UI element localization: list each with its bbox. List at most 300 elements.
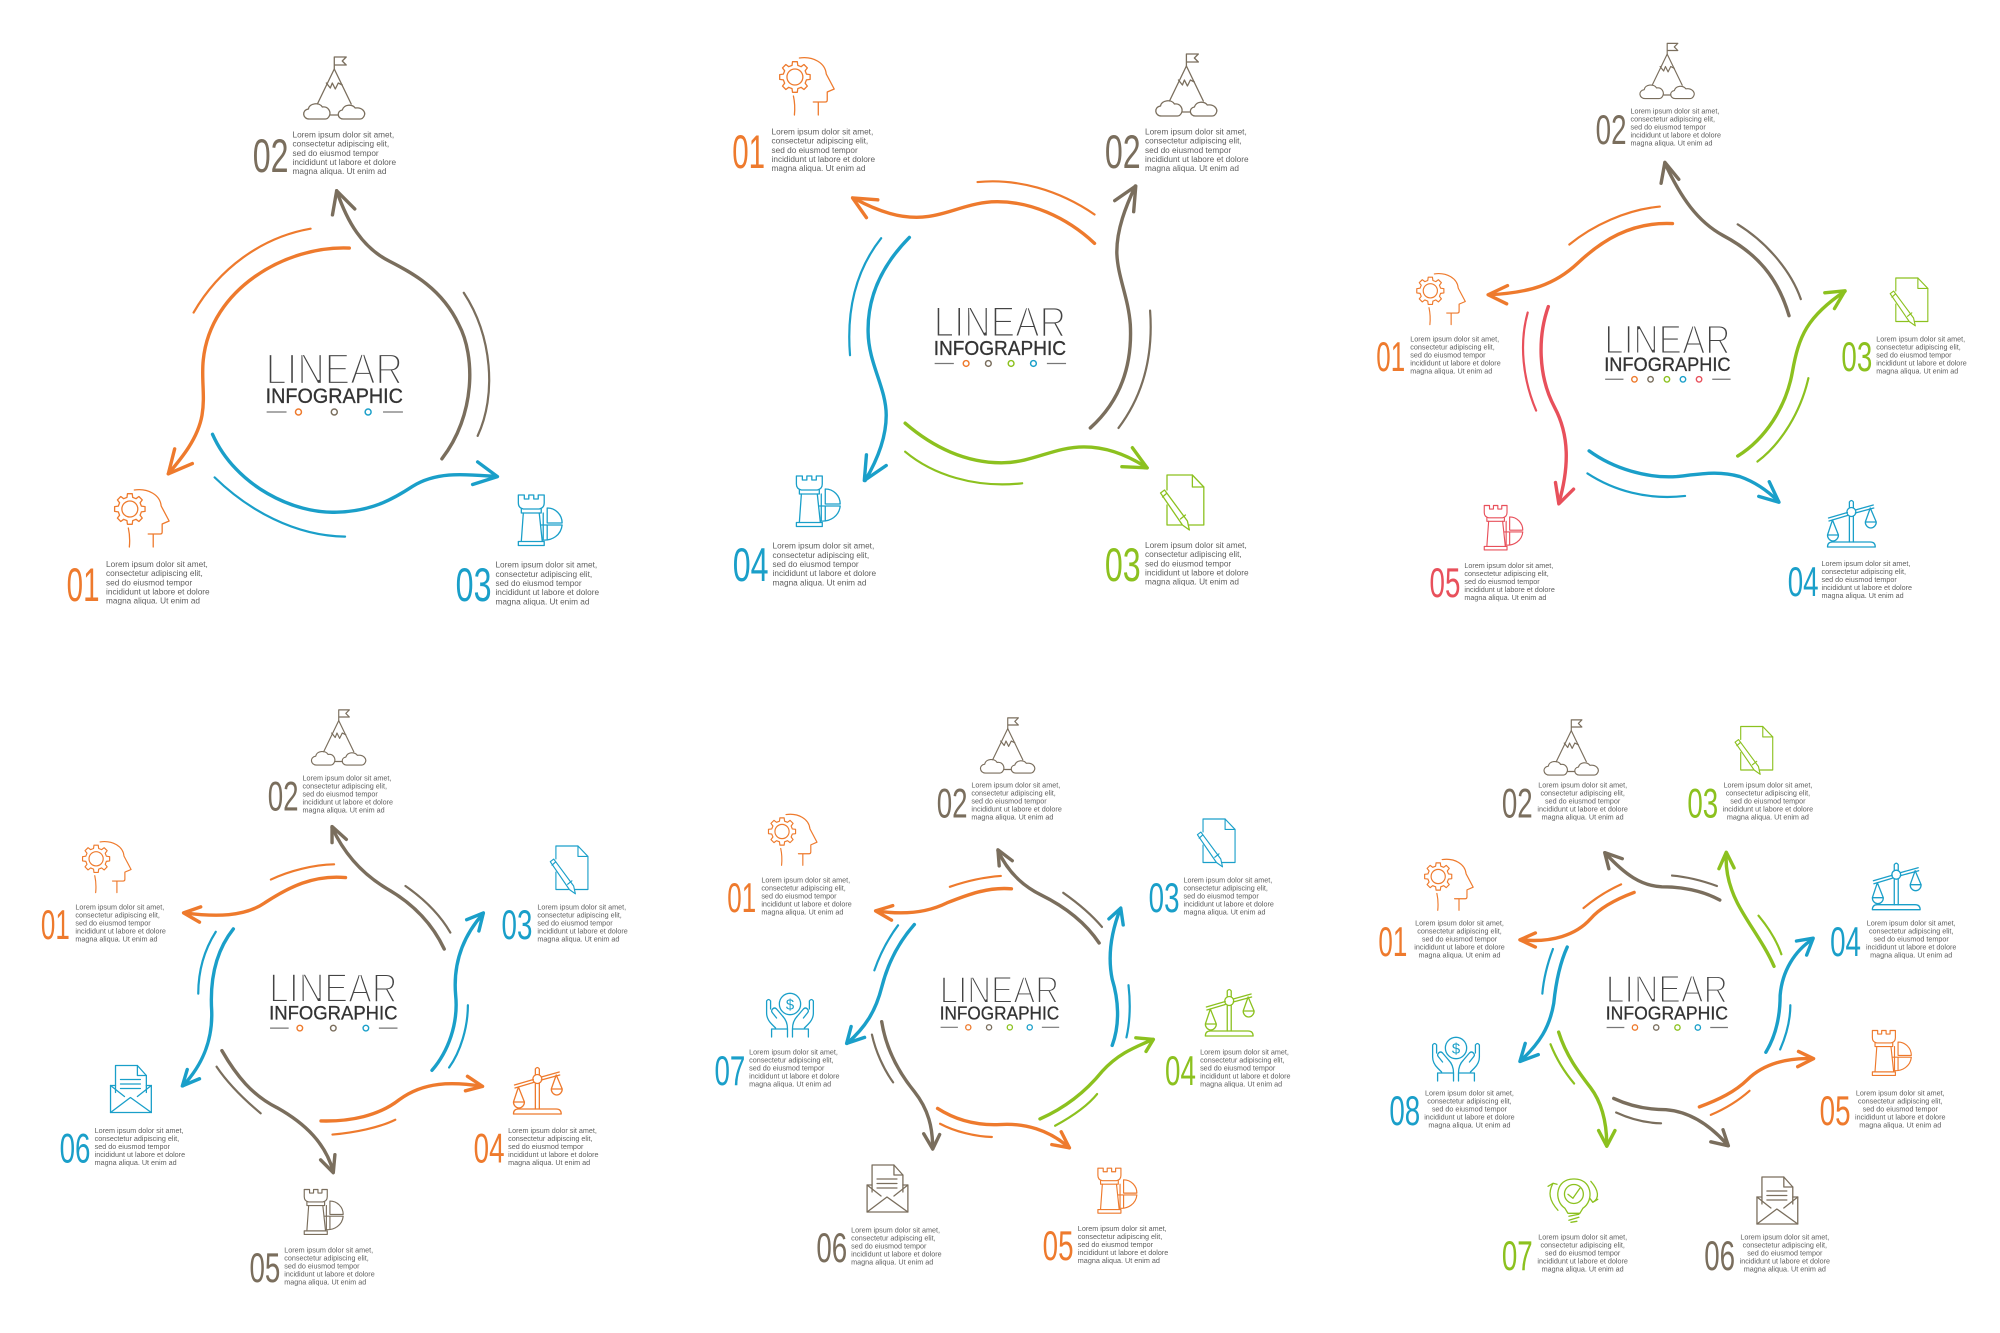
arrow: brown 06	[1614, 1098, 1728, 1146]
text block: incididunt ut labore et dolore	[75, 927, 166, 936]
text block: magna aliqua. Ut enim ad	[95, 1158, 177, 1167]
number 02: 02	[268, 772, 299, 820]
arrow: brown	[1090, 186, 1151, 428]
number 04: 04	[733, 539, 769, 591]
arrow: blue	[213, 434, 497, 537]
icon: envelope with letter	[867, 1165, 908, 1212]
arrow: orange 01	[876, 876, 1011, 920]
text block: consectetur adipiscing elit,	[1078, 1232, 1162, 1241]
icon: balance scale	[1205, 990, 1254, 1036]
number 06: 06	[1704, 1232, 1735, 1279]
item 04	[1788, 500, 1912, 605]
number 05: 05	[250, 1244, 280, 1291]
number 01: 01	[1376, 333, 1405, 380]
text block: Lorem ipsum dolor sit amet,	[1867, 919, 1956, 928]
number 02: 02	[1502, 780, 1533, 827]
text block: sed do eiusmod tempor	[1545, 797, 1621, 806]
text block: magna aliqua. Ut enim ad	[1822, 591, 1904, 600]
item 07	[1502, 1179, 1628, 1279]
item 01	[67, 490, 210, 611]
text block: incididunt ut labore et dolore	[495, 588, 599, 597]
text block: Lorem ipsum dolor sit amet,	[95, 1126, 183, 1135]
text block: incididunt ut labore et dolore	[303, 798, 393, 807]
center logo: LINEAR	[269, 965, 397, 1011]
number 02: 02	[937, 780, 968, 827]
item 06	[60, 1066, 185, 1172]
text block: incididunt ut labore et dolore	[106, 587, 210, 597]
arrow: blue 03	[432, 913, 483, 1070]
text block: Lorem ipsum dolor sit amet,	[1200, 1048, 1289, 1057]
text block: incididunt ut labore et dolore	[1183, 900, 1274, 909]
arrow: brown 06	[872, 1022, 940, 1149]
text block: Lorem ipsum dolor sit amet,	[284, 1246, 373, 1255]
text block: sed do eiusmod tempor	[761, 892, 837, 901]
text block: sed do eiusmod tempor	[1863, 1104, 1938, 1113]
center logo: INFOGRAPHIC	[1606, 1002, 1728, 1024]
text block: Lorem ipsum dolor sit amet,	[106, 560, 208, 569]
arrow: green	[905, 423, 1147, 484]
number 04: 04	[474, 1125, 505, 1172]
text block: consectetur adipiscing elit,	[772, 137, 868, 146]
arrow: blue 08	[1520, 947, 1567, 1061]
text block: magna aliqua. Ut enim ad	[495, 597, 590, 606]
text block: sed do eiusmod tempor	[772, 146, 858, 155]
panel: six-step cycle	[41, 710, 628, 1291]
item 02	[268, 710, 393, 820]
text block: incididunt ut labore et dolore	[1822, 583, 1912, 592]
number 02: 02	[1105, 126, 1141, 178]
item 02	[1502, 720, 1628, 827]
text block: consectetur adipiscing elit,	[1540, 1241, 1625, 1250]
icon: envelope with letter	[111, 1066, 151, 1112]
text block: magna aliqua. Ut enim ad	[106, 597, 200, 606]
text block: magna aliqua. Ut enim ad	[971, 813, 1053, 822]
center logo: LINEAR	[1604, 316, 1731, 363]
item 05	[250, 1190, 375, 1291]
text block: Lorem ipsum dolor sit amet,	[1538, 781, 1627, 790]
item 04	[1830, 863, 1956, 965]
text block: consectetur adipiscing elit,	[1726, 789, 1810, 798]
text block: consectetur adipiscing elit,	[773, 551, 869, 560]
text block: sed do eiusmod tempor	[851, 1242, 927, 1251]
number 04: 04	[1830, 918, 1861, 965]
text block: sed do eiusmod tempor	[75, 919, 151, 928]
text block: sed do eiusmod tempor	[508, 1142, 584, 1151]
icon: chess rook with pie chart	[1872, 1030, 1911, 1075]
panel: seven-step cycle	[714, 718, 1291, 1271]
text block: incididunt ut labore et dolore	[1424, 1112, 1515, 1121]
text block: incididunt ut labore et dolore	[293, 158, 396, 167]
icon: head with gear	[1417, 274, 1465, 325]
item 07	[714, 993, 840, 1094]
text block: magna aliqua. Ut enim ad	[851, 1258, 933, 1267]
text block: consectetur adipiscing elit,	[1200, 1056, 1285, 1065]
icon: document and pen	[550, 846, 588, 894]
center logo	[1606, 969, 1728, 1030]
text block: magna aliqua. Ut enim ad	[1542, 1265, 1624, 1274]
text block: sed do eiusmod tempor	[749, 1064, 825, 1073]
text block: sed do eiusmod tempor	[303, 790, 378, 799]
text block: magna aliqua. Ut enim ad	[1870, 951, 1952, 960]
text block: sed do eiusmod tempor	[1410, 351, 1486, 360]
text block: consectetur adipiscing elit,	[508, 1134, 593, 1143]
text block: sed do eiusmod tempor	[773, 560, 859, 569]
text block: Lorem ipsum dolor sit amet,	[508, 1126, 597, 1135]
text block: consectetur adipiscing elit,	[1145, 550, 1242, 559]
text block: Lorem ipsum dolor sit amet,	[1876, 335, 1965, 344]
text block: incididunt ut labore et dolore	[1200, 1072, 1291, 1081]
number 05: 05	[1430, 559, 1460, 606]
text block: sed do eiusmod tempor	[1183, 892, 1259, 901]
center logo: INFOGRAPHIC	[940, 1003, 1059, 1024]
number 03: 03	[1105, 539, 1141, 591]
item 03	[456, 495, 599, 611]
number 05: 05	[1043, 1222, 1074, 1269]
arrow: green 04	[1040, 1038, 1153, 1126]
text block: incididunt ut labore et dolore	[1866, 943, 1956, 952]
icon: head with gear	[768, 814, 817, 865]
number 05: 05	[1820, 1087, 1850, 1134]
text block: consectetur adipiscing elit,	[1464, 569, 1549, 578]
arrow: green 03	[1719, 852, 1781, 966]
text block: consectetur adipiscing elit,	[1183, 884, 1268, 893]
text block: Lorem ipsum dolor sit amet,	[1183, 876, 1272, 885]
text block: incididunt ut labore et dolore	[772, 155, 876, 164]
text block: Lorem ipsum dolor sit amet,	[761, 876, 850, 885]
text block: magna aliqua. Ut enim ad	[1631, 139, 1713, 148]
item 02	[1105, 54, 1249, 178]
panel: five-step cycle	[1376, 43, 1967, 606]
arrow: brown 02	[332, 827, 450, 949]
text block: consectetur adipiscing elit,	[1869, 927, 1953, 936]
number 08: 08	[1389, 1087, 1420, 1134]
text block: incididunt ut labore et dolore	[1631, 131, 1721, 140]
item 03	[1841, 278, 1967, 380]
text block: sed do eiusmod tempor	[1078, 1240, 1154, 1249]
text block: consectetur adipiscing elit,	[1631, 115, 1715, 124]
icon: hands holding dollar coin: $	[786, 996, 795, 1014]
text block: sed do eiusmod tempor	[1730, 797, 1806, 806]
icon: head with gear	[780, 58, 834, 115]
text block: incididunt ut labore et dolore	[1145, 155, 1249, 164]
arrow: orange 05	[1699, 1051, 1814, 1115]
text block: Lorem ipsum dolor sit amet,	[1822, 559, 1910, 568]
text block: Lorem ipsum dolor sit amet,	[75, 903, 164, 912]
text block: Lorem ipsum dolor sit amet,	[1415, 919, 1504, 928]
icon: chess rook with pie chart	[796, 476, 840, 526]
item 06	[816, 1165, 942, 1271]
item 03	[1687, 726, 1813, 827]
icon: mountain with flag	[304, 57, 365, 119]
icon: mountain with flag	[311, 710, 366, 765]
text block: sed do eiusmod tempor	[971, 797, 1047, 806]
text block: consectetur adipiscing elit,	[971, 789, 1056, 798]
text block: incididunt ut labore et dolore	[761, 900, 852, 909]
item 08	[1389, 1037, 1515, 1134]
icon: mountain with flag	[1156, 54, 1217, 116]
text block: Lorem ipsum dolor sit amet,	[1723, 781, 1812, 790]
text block: sed do eiusmod tempor	[1464, 577, 1540, 586]
text block: incididunt ut labore et dolore	[1537, 805, 1628, 814]
text block: incididunt ut labore et dolore	[1876, 359, 1967, 368]
text block: magna aliqua. Ut enim ad	[761, 908, 843, 917]
text block: magna aliqua. Ut enim ad	[1145, 578, 1239, 587]
text block: Lorem ipsum dolor sit amet,	[1856, 1088, 1945, 1097]
text block: magna aliqua. Ut enim ad	[749, 1080, 831, 1089]
text block: consectetur adipiscing elit,	[75, 911, 160, 920]
text block: consectetur adipiscing elit,	[761, 884, 846, 893]
item 03	[1105, 475, 1249, 591]
text block: magna aliqua. Ut enim ad	[773, 578, 867, 587]
icon: balance scale	[1828, 500, 1876, 547]
text block: sed do eiusmod tempor	[495, 579, 582, 588]
icon: chess rook with pie chart	[304, 1190, 343, 1234]
arrow: blue 04	[1766, 938, 1813, 1052]
icon: mountain with flag	[1640, 43, 1694, 99]
text block: consectetur adipiscing elit,	[1145, 137, 1242, 146]
text block: sed do eiusmod tempor	[1747, 1249, 1823, 1258]
center logo: LINEAR	[934, 298, 1066, 346]
number 04: 04	[1788, 558, 1819, 605]
text block: consectetur adipiscing elit,	[1858, 1096, 1942, 1105]
number 01: 01	[1378, 918, 1407, 965]
text block: sed do eiusmod tempor	[1876, 351, 1952, 360]
arrow: green 07	[1550, 1032, 1615, 1146]
number 03: 03	[1149, 874, 1179, 921]
item 03	[1149, 819, 1274, 921]
text block: consectetur adipiscing elit,	[1876, 343, 1961, 352]
icon: mountain with flag	[980, 718, 1035, 773]
text block: magna aliqua. Ut enim ad	[1744, 1265, 1826, 1274]
text block: magna aliqua. Ut enim ad	[303, 806, 385, 815]
icon: head with gear	[1425, 859, 1473, 910]
text block: consectetur adipiscing elit,	[1410, 343, 1495, 352]
text block: magna aliqua. Ut enim ad	[284, 1278, 366, 1287]
number 07: 07	[1502, 1232, 1533, 1279]
number 01: 01	[41, 901, 70, 948]
panel: three-step cycle	[67, 57, 599, 611]
text block: incididunt ut labore et dolore	[1464, 585, 1555, 594]
text block: Lorem ipsum dolor sit amet,	[772, 127, 873, 137]
icon: hands holding dollar coin: $	[1452, 1040, 1461, 1058]
item 04	[733, 476, 877, 591]
icon: chess rook with pie chart	[1484, 506, 1523, 550]
text block: Lorem ipsum dolor sit amet,	[851, 1226, 940, 1235]
text block: consectetur adipiscing elit,	[1417, 927, 1502, 936]
arrow: brown 05	[217, 1051, 335, 1173]
arrow: blue 06	[182, 929, 233, 1086]
item 01	[1376, 274, 1501, 380]
text block: Lorem ipsum dolor sit amet,	[749, 1048, 838, 1057]
text block: consectetur adipiscing elit,	[1540, 789, 1625, 798]
arrow: blue 03	[1109, 908, 1130, 1045]
text block: consectetur adipiscing elit,	[1427, 1096, 1512, 1105]
text block: magna aliqua. Ut enim ad	[537, 935, 619, 944]
text block: magna aliqua. Ut enim ad	[1078, 1256, 1160, 1265]
text block: incididunt ut labore et dolore	[851, 1250, 942, 1259]
text block: magna aliqua. Ut enim ad	[1859, 1120, 1941, 1129]
text block: Lorem ipsum dolor sit amet,	[1631, 107, 1719, 116]
number 03: 03	[456, 559, 491, 611]
arrow: orange 05	[938, 1108, 1069, 1148]
text block: incididunt ut labore et dolore	[95, 1150, 185, 1159]
text block: Lorem ipsum dolor sit amet,	[1145, 541, 1247, 550]
text block: sed do eiusmod tempor	[1422, 935, 1498, 944]
text block: sed do eiusmod tempor	[1145, 559, 1231, 568]
text block: consectetur adipiscing elit,	[851, 1234, 936, 1243]
text block: incididunt ut labore et dolore	[1537, 1257, 1628, 1266]
text block: incididunt ut labore et dolore	[1145, 568, 1249, 578]
text block: Lorem ipsum dolor sit amet,	[773, 542, 874, 551]
panel: four-step cycle	[732, 54, 1249, 591]
arrow: orange 04	[321, 1076, 483, 1135]
panel: eight-step cycle	[1378, 720, 1956, 1279]
icon: mountain with flag	[1544, 720, 1598, 775]
text block: consectetur adipiscing elit,	[95, 1134, 179, 1143]
text block: sed do eiusmod tempor	[537, 919, 613, 928]
item 01	[727, 814, 852, 921]
icon: balance scale	[1872, 863, 1921, 910]
text block: sed do eiusmod tempor	[1145, 146, 1231, 155]
icon: chess rook with pie chart	[518, 495, 562, 546]
icon: document and pen	[1161, 475, 1204, 530]
text block: magna aliqua. Ut enim ad	[1727, 813, 1809, 822]
number 01: 01	[67, 559, 99, 611]
number 06: 06	[816, 1224, 847, 1271]
text block: consectetur adipiscing elit,	[293, 140, 389, 149]
number 03: 03	[1687, 780, 1718, 827]
text block: magna aliqua. Ut enim ad	[508, 1158, 590, 1167]
text block: sed do eiusmod tempor	[1545, 1249, 1621, 1258]
text block: incididunt ut labore et dolore	[537, 927, 628, 936]
text block: Lorem ipsum dolor sit amet,	[303, 774, 391, 783]
item 03	[502, 846, 628, 948]
text block: magna aliqua. Ut enim ad	[293, 167, 387, 176]
text block: sed do eiusmod tempor	[284, 1262, 360, 1271]
icon: light bulb with check mark	[1548, 1179, 1598, 1222]
item 02	[253, 57, 396, 182]
text block: consectetur adipiscing elit,	[284, 1254, 369, 1263]
arrow: orange	[853, 181, 1095, 243]
text block: magna aliqua. Ut enim ad	[1183, 908, 1266, 917]
arrow: brown	[332, 191, 489, 459]
text block: magna aliqua. Ut enim ad	[772, 164, 866, 173]
number 01: 01	[727, 874, 756, 921]
text block: Lorem ipsum dolor sit amet,	[1425, 1088, 1514, 1097]
item 04	[1165, 990, 1291, 1094]
item 01	[732, 58, 876, 178]
number 03: 03	[502, 901, 532, 948]
text block: Lorem ipsum dolor sit amet,	[1464, 561, 1553, 570]
center logo: LINEAR	[1606, 969, 1728, 1012]
text block: incididunt ut labore et dolore	[749, 1072, 840, 1081]
arrow: orange	[168, 229, 349, 474]
text block: magna aliqua. Ut enim ad	[1464, 593, 1546, 602]
number 06: 06	[60, 1125, 90, 1172]
center logo: LINEAR	[940, 969, 1059, 1012]
arrow: red	[1523, 307, 1574, 504]
text block: magna aliqua. Ut enim ad	[1200, 1080, 1282, 1089]
arrow: orange 01	[1520, 884, 1634, 947]
icon: balance scale	[513, 1068, 562, 1114]
number 04: 04	[1165, 1047, 1196, 1094]
center logo	[934, 298, 1066, 366]
center logo: INFOGRAPHIC	[1604, 355, 1731, 376]
arrow: orange 01	[184, 864, 346, 922]
text block: consectetur adipiscing elit,	[495, 570, 592, 579]
text block: magna aliqua. Ut enim ad	[1428, 1120, 1510, 1129]
text block: Lorem ipsum dolor sit amet,	[1410, 335, 1499, 344]
item 02	[1596, 43, 1721, 153]
text block: Lorem ipsum dolor sit amet,	[1078, 1224, 1167, 1233]
text block: incididunt ut labore et dolore	[773, 569, 877, 578]
text block: consectetur adipiscing elit,	[537, 911, 622, 920]
text block: Lorem ipsum dolor sit amet,	[1538, 1233, 1627, 1242]
text block: incididunt ut labore et dolore	[1723, 805, 1813, 814]
center logo	[269, 965, 397, 1031]
text block: incididunt ut labore et dolore	[1410, 359, 1501, 368]
text block: Lorem ipsum dolor sit amet,	[971, 781, 1060, 790]
text block: sed do eiusmod tempor	[106, 578, 192, 587]
icon: head with gear	[115, 490, 169, 547]
arrow: brown 02	[1605, 853, 1720, 900]
arrow: brown	[1661, 162, 1801, 316]
text block: incididunt ut labore et dolore	[1740, 1257, 1830, 1266]
text block: Lorem ipsum dolor sit amet,	[1740, 1233, 1829, 1242]
item 06	[1704, 1177, 1830, 1279]
arrow: blue	[849, 237, 909, 481]
text block: incididunt ut labore et dolore	[284, 1270, 375, 1279]
text block: magna aliqua. Ut enim ad	[1410, 367, 1492, 376]
text block: incididunt ut labore et dolore	[1414, 943, 1505, 952]
arrow: green	[1738, 291, 1845, 462]
center logo: INFOGRAPHIC	[266, 385, 403, 408]
number 03: 03	[1841, 333, 1872, 380]
number 02: 02	[1596, 106, 1627, 153]
text block: incididunt ut labore et dolore	[1078, 1248, 1168, 1257]
text block: sed do eiusmod tempor	[293, 149, 379, 158]
text block: consectetur adipiscing elit,	[1822, 567, 1906, 576]
item 05	[1043, 1168, 1168, 1269]
item 01	[1378, 859, 1505, 965]
item 02	[937, 718, 1062, 827]
number 02: 02	[253, 130, 289, 182]
number 01: 01	[732, 126, 765, 178]
text block: consectetur adipiscing elit,	[1743, 1241, 1827, 1250]
item 05	[1820, 1030, 1945, 1134]
center logo: LINEAR	[266, 345, 403, 394]
icon: chess rook with pie chart	[1098, 1168, 1137, 1213]
center logo	[940, 969, 1059, 1030]
arrow: orange	[1488, 207, 1672, 304]
text block: consectetur adipiscing elit,	[106, 569, 203, 578]
number 07: 07	[714, 1047, 745, 1094]
text block: magna aliqua. Ut enim ad	[1145, 164, 1239, 173]
text block: sed do eiusmod tempor	[1200, 1064, 1276, 1073]
text block: consectetur adipiscing elit,	[749, 1056, 834, 1065]
text block: magna aliqua. Ut enim ad	[75, 935, 157, 944]
text block: sed do eiusmod tempor	[1631, 123, 1706, 132]
icon: head with gear	[83, 842, 131, 893]
center logo: INFOGRAPHIC	[269, 1003, 397, 1025]
text block: sed do eiusmod tempor	[95, 1142, 170, 1151]
item 05	[1430, 506, 1555, 606]
text block: Lorem ipsum dolor sit amet,	[1145, 127, 1247, 137]
item 01	[41, 842, 166, 948]
text block: sed do eiusmod tempor	[1874, 935, 1949, 944]
text block: sed do eiusmod tempor	[1822, 575, 1897, 584]
center logo	[1604, 316, 1731, 382]
